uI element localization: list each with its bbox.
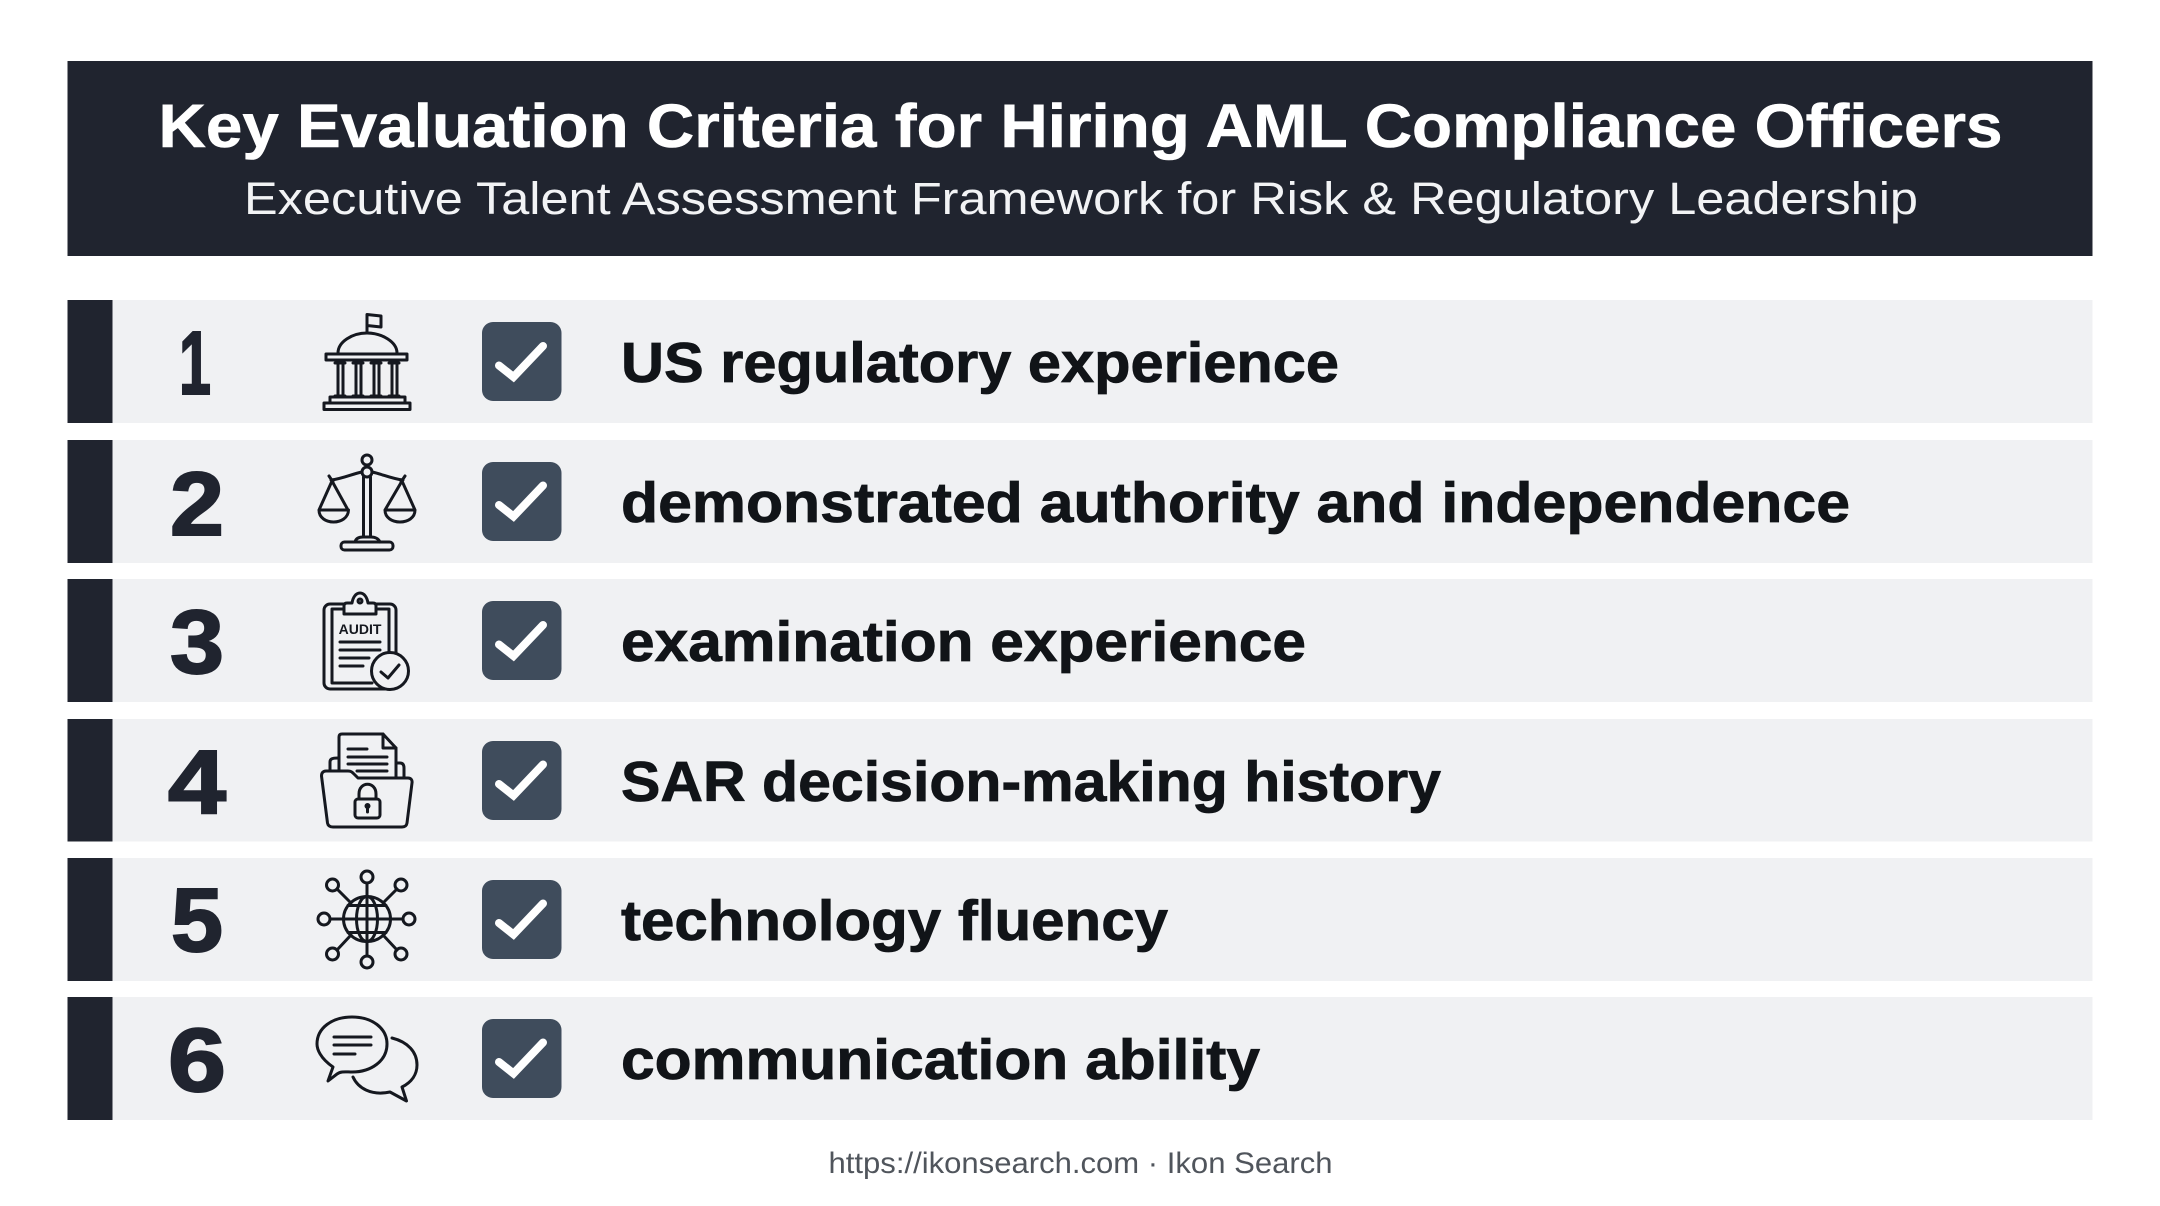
- icon: audit clipboard: AUDIT: [339, 621, 382, 637]
- criterion text: communication ability: [621, 1028, 1260, 1092]
- row 4: SAR decision-making history: [68, 719, 2092, 842]
- number 6: 6: [168, 1011, 226, 1111]
- number 3: 3: [170, 593, 224, 693]
- title: Key Evaluation Criteria for Hiring AML Compliance Officers: [158, 92, 2002, 160]
- checkbox: [482, 741, 562, 820]
- criterion text: US regulatory experience: [621, 331, 1339, 395]
- criterion text: SAR decision-making history: [621, 750, 1441, 814]
- icon: government building: [324, 314, 410, 410]
- icon: audit clipboard: [324, 593, 408, 690]
- row 2: demonstrated authority and independence: [68, 440, 2092, 563]
- icon: global network: [318, 871, 415, 968]
- icon: locked folder: [322, 734, 412, 827]
- number 2: 2: [170, 455, 224, 555]
- footer source line: https://ikonsearch.com · Ikon Search: [828, 1147, 1332, 1180]
- checkbox: [482, 601, 562, 680]
- checkbox: [482, 880, 562, 959]
- checkbox: [482, 1019, 562, 1098]
- criterion text: technology fluency: [621, 889, 1168, 953]
- checkbox: [482, 462, 562, 541]
- icon: speech bubbles: [317, 1017, 417, 1101]
- row 6: communication ability: [68, 997, 2092, 1120]
- header banner: [68, 61, 2092, 256]
- icon: scales of justice: [319, 455, 415, 550]
- checkbox: [482, 322, 562, 401]
- row 3: examination experience: [68, 579, 2092, 702]
- criterion text: demonstrated authority and independence: [621, 471, 1850, 535]
- subtitle: Executive Talent Assessment Framework for Risk & Regulatory Leadership: [244, 173, 1918, 224]
- row 5: technology fluency: [68, 858, 2092, 981]
- number 1: 1: [179, 314, 211, 414]
- criterion text: examination experience: [621, 610, 1306, 674]
- number 5: 5: [171, 871, 223, 971]
- row 1: US regulatory experience: [68, 300, 2092, 423]
- number 4: 4: [168, 733, 226, 833]
